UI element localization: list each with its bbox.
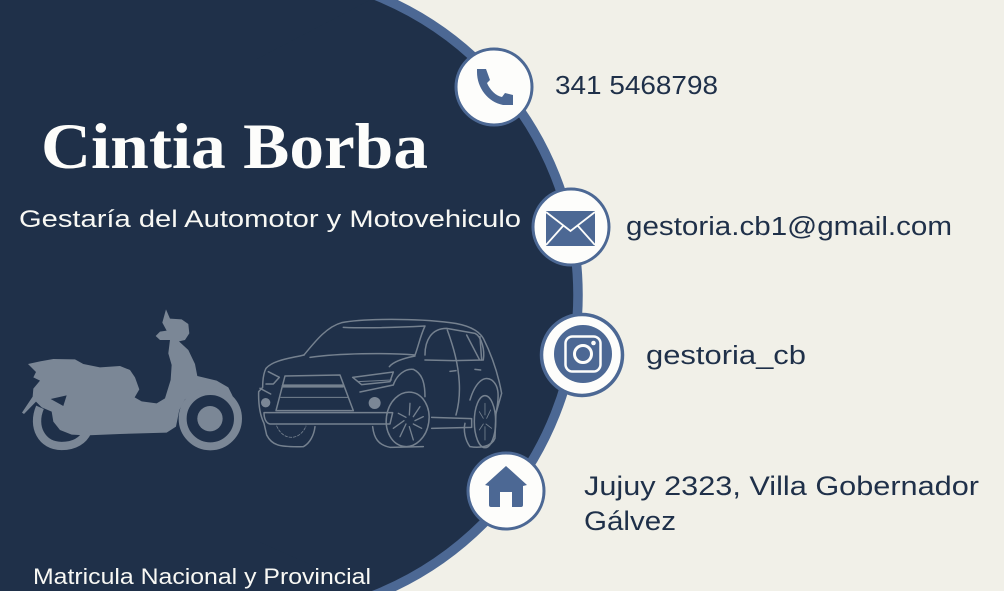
address	[584, 471, 979, 536]
icon: car outline	[259, 319, 502, 449]
instagram handle: gestoria_cb	[646, 342, 806, 370]
phone number: 341 5468798	[555, 72, 718, 100]
icon: scooter	[22, 309, 238, 446]
subtitle: Gestaría del Automotor y Motovehiculo	[19, 206, 521, 233]
title: Cintia Borba	[41, 111, 428, 183]
address: Jujuy 2323, Villa Gobernador	[584, 471, 979, 501]
navy circle panel	[0, 0, 578, 591]
icon: home	[468, 453, 544, 529]
icon: phone	[456, 49, 532, 125]
email: gestoria.cb1@gmail.com	[626, 213, 952, 241]
address: Gálvez	[584, 506, 676, 536]
footer note: Matricula Nacional y Provincial	[33, 564, 371, 589]
icon: envelope	[533, 189, 609, 265]
icon: instagram	[542, 314, 622, 396]
